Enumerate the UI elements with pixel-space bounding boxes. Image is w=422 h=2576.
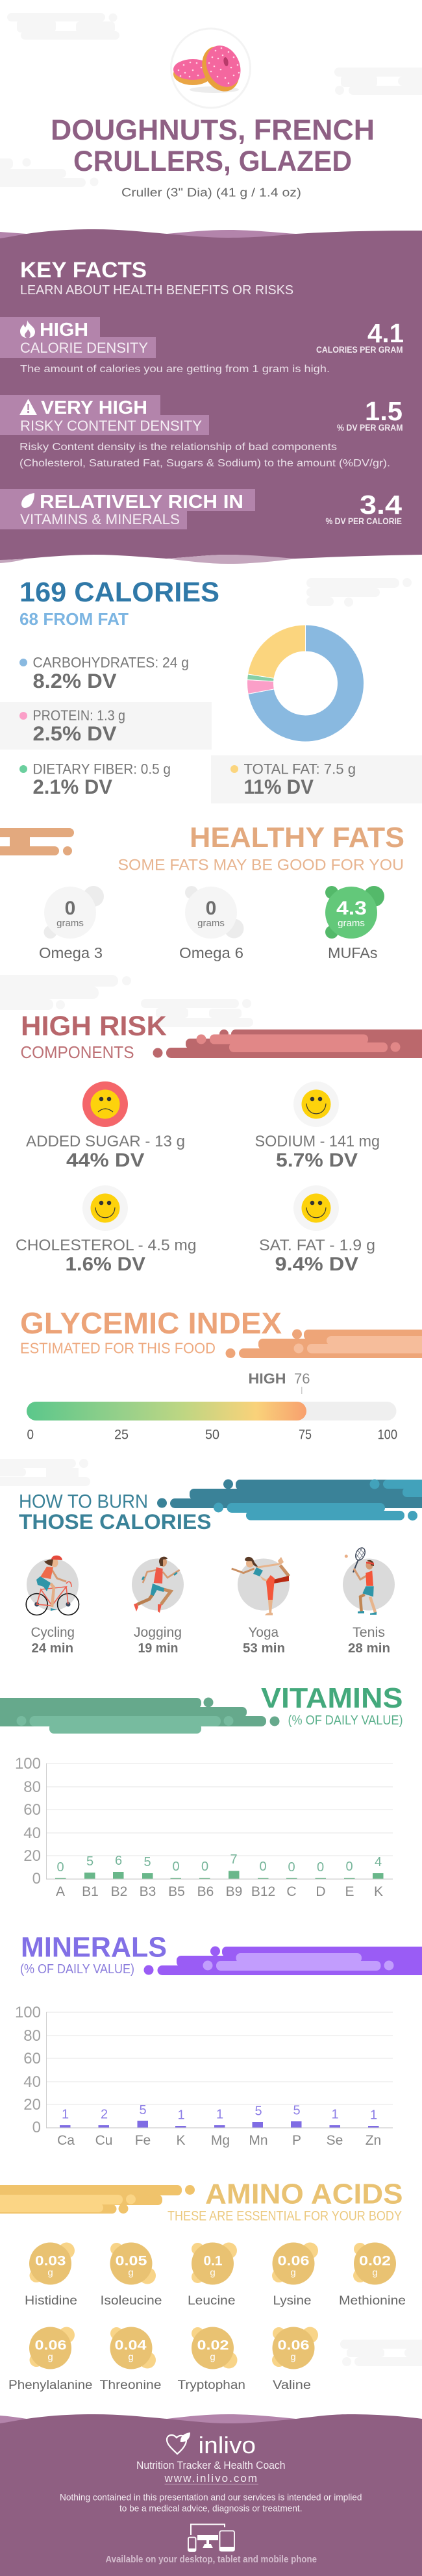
heading: AMINO ACIDS xyxy=(205,2178,403,2210)
bar chart: minerals: Mn xyxy=(249,2133,268,2148)
icon: smiley xyxy=(82,1185,128,1231)
fact: relatively rich in vitamins and minerals xyxy=(0,489,402,529)
nutrient: total fat xyxy=(211,755,422,803)
fact: high calorie density xyxy=(0,317,404,375)
gauge scale: 25 xyxy=(114,1428,129,1442)
metric: omega 3: Omega 3 xyxy=(39,944,103,961)
fact: relatively rich in vitamins and minerals: 3.4 xyxy=(360,490,402,520)
amino: histidine: g xyxy=(47,2267,53,2279)
risk item: sodium: 5.7% DV xyxy=(276,1150,358,1171)
activity: tennis: 28 min xyxy=(348,1641,390,1656)
icon: runner xyxy=(134,1557,180,1613)
metric: MUFAs xyxy=(325,886,384,961)
icon: smiley xyxy=(293,1081,339,1127)
background cloud top right xyxy=(334,68,422,95)
amino: phenylalanine: 0.06 xyxy=(35,2338,66,2353)
amino: isoleucine xyxy=(100,2242,162,2308)
donut chart xyxy=(247,625,364,742)
bar chart: minerals: 1 xyxy=(62,2107,69,2121)
amino: isoleucine: Isoleucine xyxy=(100,2293,162,2308)
amino: tryptophan: Tryptophan xyxy=(178,2378,245,2392)
heading: MINERALS xyxy=(21,1932,167,1963)
gauge bar xyxy=(27,1402,396,1421)
metric: omega 3 xyxy=(39,886,104,961)
amino: phenylalanine: Phenylalanine xyxy=(8,2378,93,2392)
bar chart: minerals: K xyxy=(176,2133,186,2148)
gauge label: high 76 xyxy=(248,1370,310,1394)
bar chart: vitamins: 6 xyxy=(115,1854,122,1868)
heading: key facts: KEY FACTS xyxy=(20,258,147,283)
panel: amino acids xyxy=(0,2178,406,2392)
amino: leucine: g xyxy=(210,2267,216,2279)
activity: tennis xyxy=(343,1547,395,1656)
amino: lysine: 0.06 xyxy=(278,2254,309,2268)
logo: inlivo xyxy=(167,2432,256,2458)
metric: omega 3: 0 xyxy=(65,898,75,919)
amino: tryptophan: 0.02 xyxy=(197,2338,229,2353)
risk item: sodium xyxy=(254,1081,380,1171)
bar chart: minerals: 20 xyxy=(23,2096,41,2114)
subheading: ESTIMATED FOR THIS FOOD xyxy=(20,1339,216,1356)
amino: leucine xyxy=(188,2242,237,2308)
fact: very high risky content density: Risky Content density is the relationship of bad components xyxy=(19,442,337,453)
amino: phenylalanine xyxy=(8,2327,93,2392)
amino: valine xyxy=(272,2327,318,2392)
amino: threonine: 0.04 xyxy=(114,2338,147,2353)
fact: very high risky content density: 1.5 xyxy=(365,396,403,426)
background cloud mid left xyxy=(0,158,99,187)
tagline: Nutrition Tracker & Health Coach xyxy=(136,2459,286,2471)
nutrient: total fat: 11% DV xyxy=(244,775,314,798)
icon: cyclist xyxy=(26,1556,79,1615)
decoration: vitamins bars xyxy=(0,1698,279,1734)
activity: yoga: 53 min xyxy=(243,1641,285,1656)
background cloud burn xyxy=(0,1459,90,1486)
decoration: amino bars xyxy=(0,2185,195,2214)
activity: cycling: Cycling xyxy=(31,1625,75,1640)
amino: lysine: g xyxy=(290,2267,296,2279)
bar chart: vitamins: B6 xyxy=(197,1884,214,1899)
amino: lysine xyxy=(272,2242,318,2308)
nutrient: dietary fiber: DIETARY FIBER: 0.5 g xyxy=(32,761,171,777)
amino: histidine: 0.03 xyxy=(35,2254,66,2268)
background cloud top left xyxy=(7,13,119,40)
background cloud amino xyxy=(340,2340,422,2366)
risk item: saturated fat xyxy=(259,1185,375,1275)
bar chart: minerals xyxy=(15,2004,393,2148)
fact: high calorie density: CALORIE DENSITY xyxy=(20,340,148,356)
fact: relatively rich in vitamins and minerals: % DV PER CALORIE xyxy=(326,516,402,526)
serving size: Cruller (3" Dia) (41 g / 1.4 oz) xyxy=(121,186,301,199)
bar chart: vitamins: K xyxy=(374,1884,383,1899)
bar chart: minerals: 1 xyxy=(216,2107,223,2121)
metric: omega 6: grams xyxy=(197,918,225,929)
bar chart: minerals: 1 xyxy=(331,2107,339,2121)
bar chart: vitamins xyxy=(15,1755,393,1899)
heading: VITAMINS xyxy=(261,1683,403,1714)
risk item: cholesterol: CHOLESTEROL - 4.5 mg xyxy=(16,1237,196,1254)
nutrient: total fat: TOTAL FAT: 7.5 g xyxy=(244,761,356,777)
disclaimer: to be a medical advice, diagnosis or treatment. xyxy=(119,2503,303,2514)
bar chart: minerals: Ca xyxy=(57,2133,75,2148)
metric: omega 6 xyxy=(179,886,244,961)
risk item: added sugar: ADDED SUGAR - 13 g xyxy=(26,1133,185,1150)
amino: valine: Valine xyxy=(273,2378,311,2392)
bar chart: vitamins: 0 xyxy=(56,1860,64,1875)
activity: cycling: 24 min xyxy=(31,1641,73,1656)
subheading: (% OF DAILY VALUE) xyxy=(20,1962,134,1976)
subheading: SOME FATS MAY BE GOOD FOR YOU xyxy=(118,856,404,874)
risk item: sodium: SODIUM - 141 mg xyxy=(254,1133,380,1150)
panel: vitamins xyxy=(0,1683,403,1899)
metric: MUFAs: grams xyxy=(338,918,365,929)
icon: leaf xyxy=(21,493,34,508)
bar chart: vitamins: E xyxy=(345,1884,354,1899)
amino: lysine: Lysine xyxy=(273,2293,312,2308)
logo: inlivo: inlivo xyxy=(199,2432,256,2458)
nutrient: protein xyxy=(0,702,212,750)
disclaimer xyxy=(60,2492,362,2514)
heading: HEALTHY FATS xyxy=(190,822,404,853)
bar chart: vitamins: 5 xyxy=(143,1855,151,1869)
panel: footer xyxy=(0,2414,422,2576)
decoration: glycemic bars xyxy=(226,1329,422,1358)
amino: isoleucine: 0.05 xyxy=(116,2254,147,2268)
amino: isoleucine: g xyxy=(128,2267,134,2279)
bar chart: vitamins: 0 xyxy=(201,1860,208,1874)
metric: omega 6: Omega 6 xyxy=(179,944,243,961)
metric: omega 6: 0 xyxy=(206,898,216,919)
amino: valine: 0.06 xyxy=(278,2338,309,2353)
amino: methionine xyxy=(339,2242,406,2308)
bar chart: minerals: Se xyxy=(327,2133,343,2148)
background cloud calories xyxy=(306,578,412,607)
bar chart: minerals: 0 xyxy=(32,2119,41,2136)
bar chart: vitamins: B12 xyxy=(251,1884,275,1899)
panel: high risk components xyxy=(16,1011,422,1275)
bar chart: vitamins: 0 xyxy=(288,1860,295,1875)
gauge label: high 76: HIGH xyxy=(248,1370,286,1387)
bar chart: vitamins: 80 xyxy=(23,1778,41,1796)
fact: high calorie density: 4.1 xyxy=(367,318,404,348)
fact: relatively rich in vitamins and minerals: RELATIVELY RICH IN xyxy=(40,492,243,512)
amino: phenylalanine: g xyxy=(47,2351,53,2363)
gauge scale: 75 xyxy=(299,1428,312,1442)
icon: smiley xyxy=(293,1185,339,1231)
heading: 169 calories: 169 CALORIES xyxy=(19,577,219,608)
bar chart: minerals: Fe xyxy=(135,2133,151,2148)
risk item: cholesterol xyxy=(16,1185,196,1275)
bar chart: minerals: P xyxy=(292,2133,301,2148)
amino: valine: g xyxy=(290,2351,296,2363)
bar chart: vitamins: A xyxy=(56,1884,65,1899)
heading: GLYCEMIC INDEX xyxy=(20,1306,282,1340)
availability note: Available on your desktop, tablet and mobile phone xyxy=(105,2555,317,2565)
amino: histidine xyxy=(25,2242,77,2308)
amino: threonine: g xyxy=(128,2351,134,2363)
heading: HIGH RISK xyxy=(21,1011,167,1042)
amino: histidine: Histidine xyxy=(25,2293,77,2308)
icon: tennis player xyxy=(345,1547,377,1615)
bar chart: vitamins: 100 xyxy=(15,1755,41,1773)
title xyxy=(51,114,375,177)
bar chart: minerals: Zn xyxy=(366,2133,381,2148)
bar chart: vitamins: 60 xyxy=(23,1801,41,1819)
icon: warning triangle xyxy=(19,399,37,415)
bar chart: vitamins: 0 xyxy=(259,1860,267,1874)
activity: jogging xyxy=(132,1557,184,1656)
activity: tennis: Tenis xyxy=(353,1625,385,1640)
background cloud high risk left xyxy=(0,975,131,1010)
bar chart: minerals: 60 xyxy=(23,2050,41,2067)
gauge scale: 50 xyxy=(205,1428,219,1442)
panel: key facts xyxy=(0,229,422,564)
metric: MUFAs: 4.3 xyxy=(336,898,367,919)
icon: yoga pose xyxy=(232,1557,289,1615)
activity: yoga: Yoga xyxy=(248,1625,279,1640)
fact: very high risky content density xyxy=(0,395,403,469)
fact: very high risky content density: RISKY CONTENT DENSITY xyxy=(20,418,202,434)
title: CRULLERS, GLAZED xyxy=(73,145,352,177)
metric: MUFAs: MUFAs xyxy=(328,944,378,961)
bar chart: minerals: 5 xyxy=(254,2104,262,2119)
activity: yoga xyxy=(232,1557,290,1656)
bar chart: vitamins: 0 xyxy=(172,1860,180,1874)
fact: relatively rich in vitamins and minerals: VITAMINS & MINERALS xyxy=(20,511,180,527)
bar chart: minerals: 100 xyxy=(15,2004,41,2021)
fact: very high risky content density: % DV PER GRAM xyxy=(337,423,403,433)
fact: very high risky content density: VERY HIGH xyxy=(41,398,147,418)
bar chart: vitamins: B3 xyxy=(140,1884,156,1899)
bar chart: minerals: 5 xyxy=(293,2103,301,2117)
amino: methionine: 0.02 xyxy=(359,2254,391,2268)
amino: tryptophan: g xyxy=(210,2351,216,2363)
bar chart: minerals: Cu xyxy=(95,2133,112,2148)
bar chart: minerals: 5 xyxy=(139,2103,147,2117)
nutrient: dietary fiber: 2.1% DV xyxy=(32,775,112,798)
gauge scale xyxy=(27,1428,397,1442)
background cloud high risk center xyxy=(141,999,253,1027)
panel: glycemic index xyxy=(20,1306,422,1442)
subheading: LEARN ABOUT HEALTH BENEFITS OR RISKS xyxy=(20,283,293,297)
risk item: added sugar xyxy=(26,1081,185,1171)
fact: very high risky content density: (Cholesterol, Saturated Fat, Sugars & Sodium) to the amount (%DV/gr). xyxy=(19,458,390,469)
food image: pink doughnuts in circle xyxy=(171,29,251,108)
bar chart: vitamins: 40 xyxy=(23,1825,41,1842)
decoration: burn bars xyxy=(157,1480,422,1521)
title: DOUGHNUTS, FRENCH xyxy=(51,114,375,146)
icon: sad face xyxy=(82,1081,128,1127)
nutrient: carbohydrates: CARBOHYDRATES: 24 g xyxy=(32,655,189,670)
bar chart: vitamins: 7 xyxy=(230,1852,238,1867)
bar chart: vitamins: B9 xyxy=(226,1884,242,1899)
gauge scale: 0 xyxy=(27,1428,34,1442)
amino: tryptophan xyxy=(178,2327,245,2392)
nutrient: protein: PROTEIN: 1.3 g xyxy=(32,707,125,724)
decoration: healthy fats bars xyxy=(0,828,74,855)
decoration: high risk bars xyxy=(153,1029,422,1058)
bar chart: vitamins: B5 xyxy=(168,1884,185,1899)
amino: methionine: g xyxy=(372,2267,378,2279)
bar chart: vitamins: D xyxy=(316,1884,326,1899)
bar chart: minerals: Mg xyxy=(211,2133,230,2148)
risk item: cholesterol: 1.6% DV xyxy=(65,1254,145,1275)
panel: how to burn those calories xyxy=(19,1480,422,1656)
panel: minerals xyxy=(15,1932,422,2148)
gauge scale: 100 xyxy=(378,1428,397,1442)
bar chart: minerals: 1 xyxy=(370,2108,377,2123)
activity: jogging: Jogging xyxy=(134,1625,182,1640)
activity: jogging: 19 min xyxy=(138,1641,178,1656)
amino: threonine xyxy=(100,2327,162,2392)
fact: high calorie density: The amount of calories you are getting from 1 gram is high. xyxy=(20,364,330,375)
amino: threonine: Threonine xyxy=(100,2378,162,2392)
bar chart: vitamins: B1 xyxy=(82,1884,99,1899)
amino: leucine: Leucine xyxy=(188,2293,236,2308)
bar chart: minerals: 40 xyxy=(23,2073,41,2091)
nutrient: carbohydrates: 8.2% DV xyxy=(32,669,117,692)
bar chart: vitamins: 0 xyxy=(317,1860,324,1875)
risk item: saturated fat: 9.4% DV xyxy=(275,1254,358,1275)
icon: flame xyxy=(20,320,35,338)
panel: calories xyxy=(0,577,422,803)
bar chart: minerals: 2 xyxy=(101,2107,108,2121)
bar chart: vitamins: 4 xyxy=(375,1855,382,1869)
website link: www.inlivo.com xyxy=(164,2472,257,2484)
activity: cycling xyxy=(26,1556,79,1656)
subheading: (% OF DAILY VALUE) xyxy=(288,1713,403,1728)
nutrient: carbohydrates xyxy=(19,655,189,692)
bar chart: vitamins: 0 xyxy=(345,1860,353,1874)
bar chart: vitamins: B2 xyxy=(111,1884,127,1899)
disclaimer: Nothing contained in this presentation and our services is intended or implied xyxy=(60,2492,362,2502)
subheading: COMPONENTS xyxy=(21,1044,134,1062)
risk item: added sugar: 44% DV xyxy=(66,1150,144,1171)
risk item: saturated fat: SAT. FAT - 1.9 g xyxy=(259,1237,375,1254)
subheading: from fat: 68 FROM FAT xyxy=(19,609,129,629)
bar chart: vitamins: 5 xyxy=(86,1854,93,1869)
heading line 2: THOSE CALORIES xyxy=(19,1510,212,1534)
heading line 1: HOW TO BURN xyxy=(19,1491,148,1512)
bar chart: vitamins: C xyxy=(286,1884,297,1899)
bar chart: minerals: 1 xyxy=(177,2108,185,2123)
nutrient: dietary fiber xyxy=(19,761,171,798)
bar chart: vitamins: 0 xyxy=(32,1870,41,1888)
decoration: minerals bars xyxy=(144,1946,422,1975)
fact: high calorie density: HIGH xyxy=(40,320,88,340)
bar chart: vitamins: 20 xyxy=(23,1847,41,1865)
amino: leucine: 0.1 xyxy=(204,2254,223,2268)
panel: healthy fats xyxy=(0,822,404,961)
icon: devices xyxy=(188,2524,234,2551)
amino: methionine: Methionine xyxy=(339,2293,406,2308)
metric: omega 3: grams xyxy=(56,918,84,929)
fact: high calorie density: CALORIES PER GRAM xyxy=(316,345,403,355)
bar chart: minerals: 80 xyxy=(23,2027,41,2045)
nutrient: protein: 2.5% DV xyxy=(32,722,117,745)
gauge label: high 76: 76 xyxy=(294,1370,310,1387)
